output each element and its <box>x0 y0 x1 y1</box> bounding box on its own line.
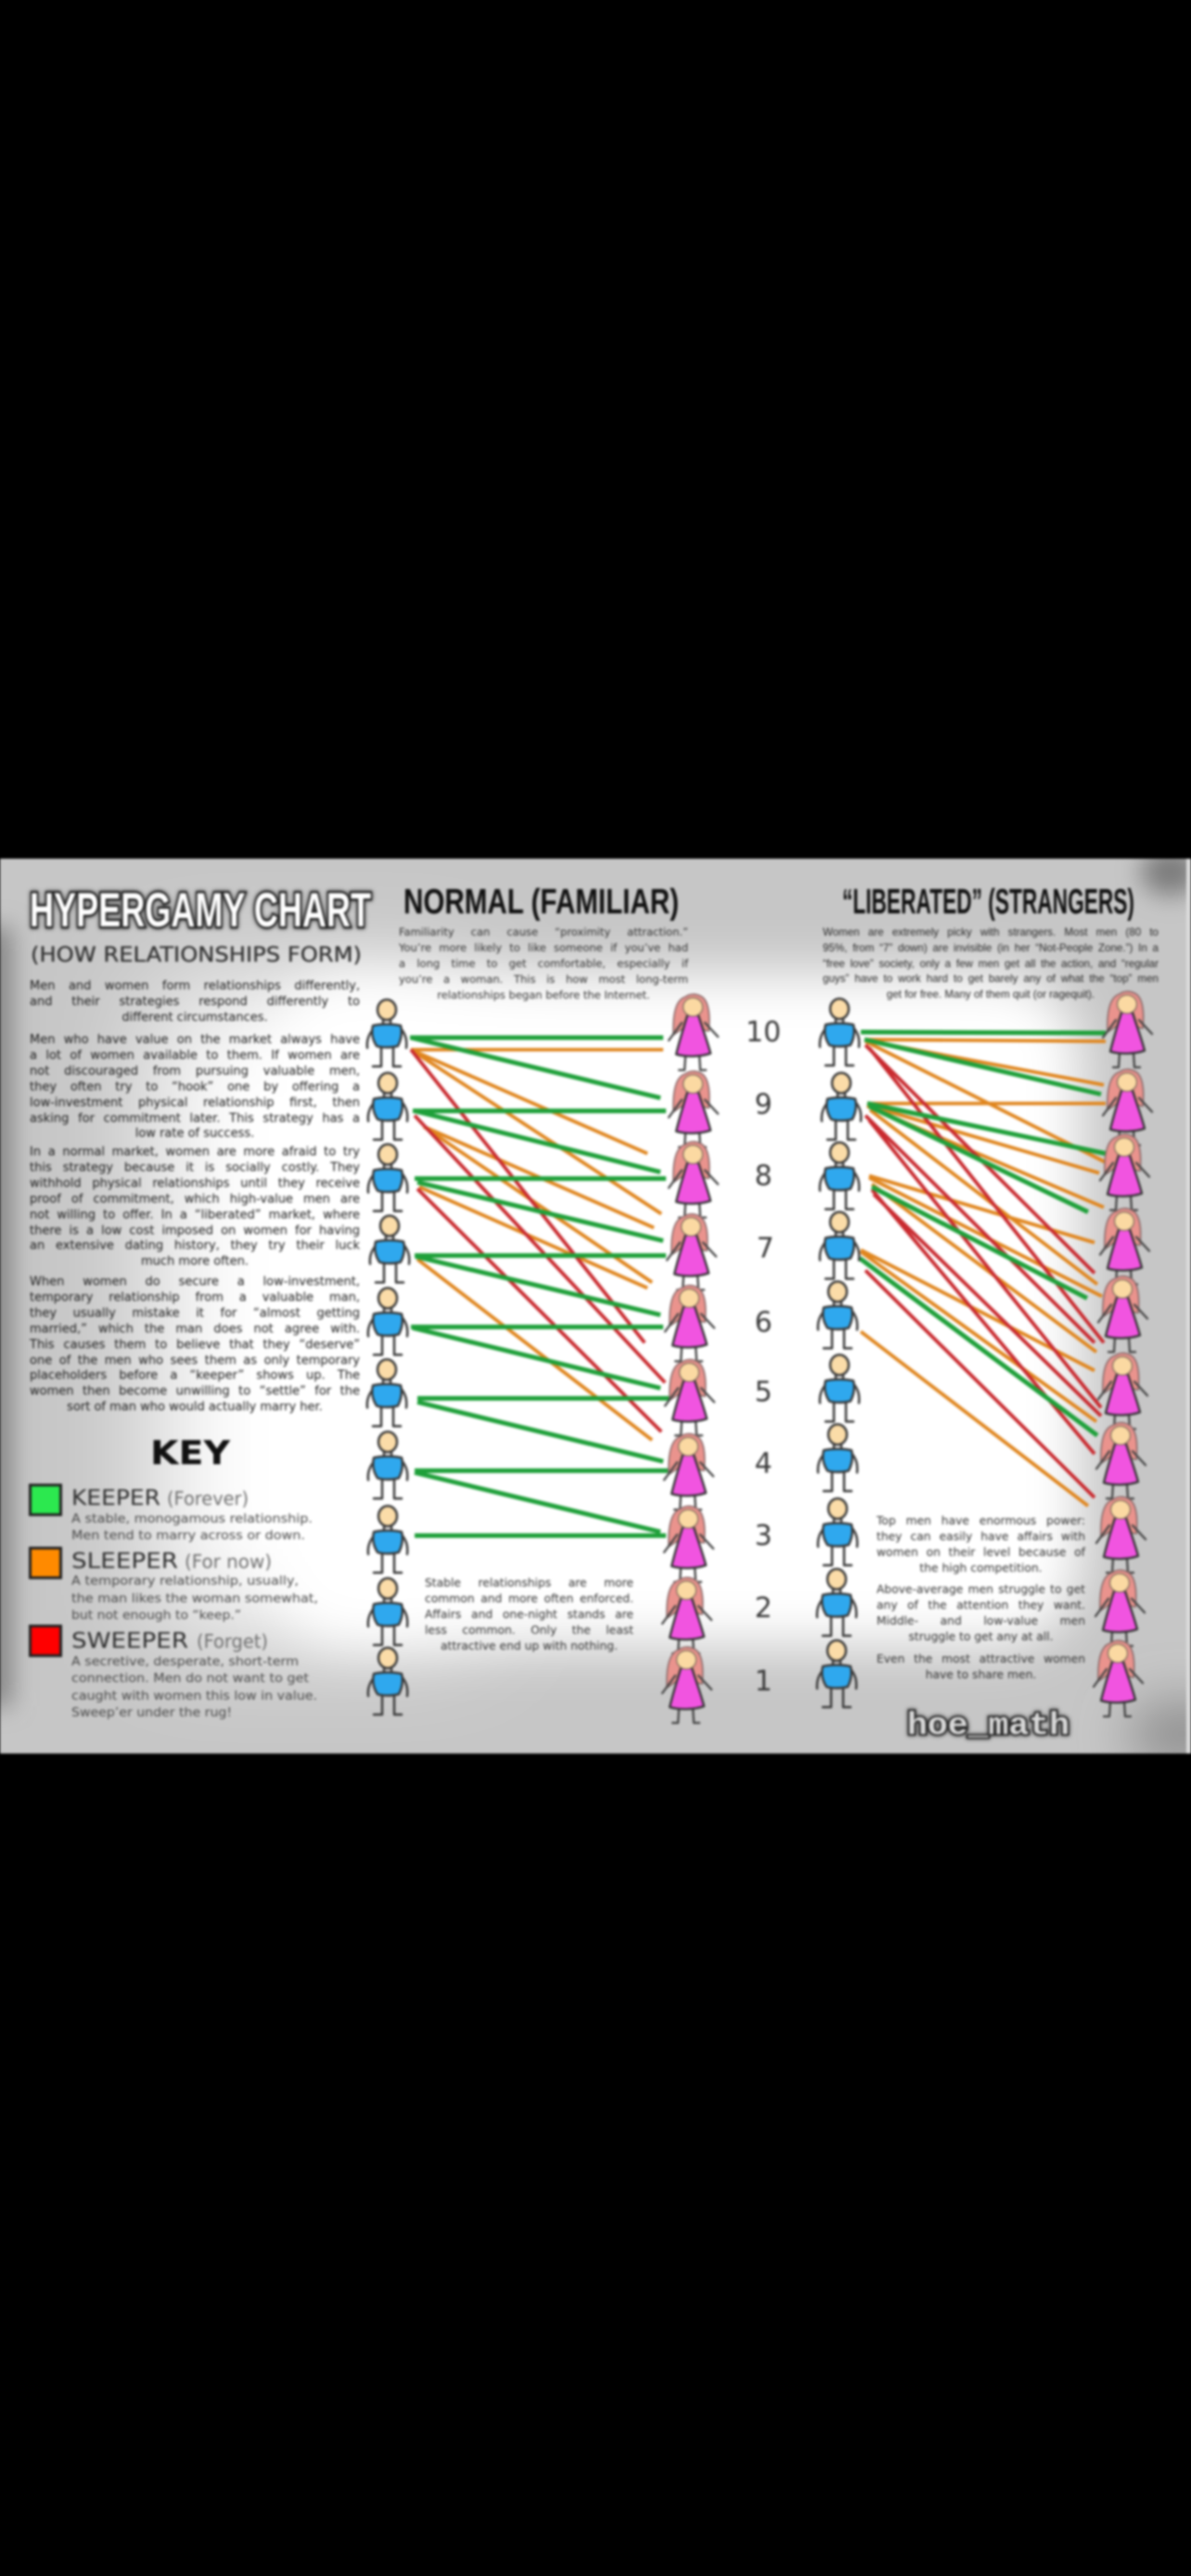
text block: liberated description: Women are extremely picky with strangers. Most men (80 to <box>823 926 1159 938</box>
text block: normal familiar description: Familiarity can cause “proximity attraction.” <box>399 925 688 938</box>
text block: top men: the high competition. <box>919 1562 1043 1575</box>
text block: low-investment relationships: they usually mistake it for “almost getting <box>30 1307 360 1320</box>
rating scale numbers 10 to 1: 3 <box>754 1520 773 1552</box>
text block: above-average men <box>876 1583 1086 1645</box>
text block: low-investment relationships: temporary relationship from a valuable man, <box>30 1291 360 1305</box>
key item: sleeper: SLEEPER <box>71 1549 178 1574</box>
text block: normal familiar description: relationships began before the Internet. <box>437 988 650 1001</box>
text block: intro <box>29 978 362 1025</box>
text block: low-investment relationships <box>28 1274 361 1415</box>
text block: normal market: much more often. <box>141 1255 249 1269</box>
normal chart: column of women <box>662 994 718 1723</box>
text block: low-investment relationships: married,” which the man does not agree with. <box>30 1322 360 1336</box>
rating scale numbers 10 to 1: 9 <box>754 1089 773 1121</box>
background panel with grey vignette <box>0 848 1191 1766</box>
text block: low-investment relationships: This causes them to believe that they “deserve” <box>30 1338 360 1352</box>
text block: men with value: low rate of success. <box>135 1127 254 1141</box>
text block: normal familiar description: you’re a woman. This is how most long-term <box>399 973 688 986</box>
text block: above-average men: Above-average men struggle to get <box>877 1583 1085 1596</box>
liberated chart: column of men <box>817 999 861 1707</box>
text block: above-average men: struggle to get any at all. <box>909 1630 1054 1643</box>
text block: men with value: they often try to “hook” one by offering a <box>30 1080 360 1094</box>
normal chart: sleeper lines (orange) <box>411 1050 663 1440</box>
text block: low-investment relationships: When women do secure a low-investment, <box>30 1275 360 1289</box>
text block: liberated description: get for free. Many of them quit (or ragequit). <box>887 988 1095 1001</box>
text block: attractive women: have to share men. <box>926 1668 1036 1681</box>
text block: normal familiar description: You’re more likely to like someone if you’ve had <box>399 941 688 954</box>
text block: low-investment relationships: placeholders before a “keeper” shows up. The <box>30 1369 360 1383</box>
text block: intro: different circumstances. <box>122 1011 268 1025</box>
text block: low-investment relationships: sort of man who would actually marry her. <box>67 1400 323 1414</box>
text block: normal market: not willing to offer. In a “liberated” market, where <box>30 1208 360 1222</box>
text block: liberated description <box>822 926 1159 1001</box>
rating scale numbers 10 to 1: 5 <box>754 1376 773 1409</box>
text block: top men: Top men have enormous power: <box>877 1514 1085 1527</box>
hoe_math watermark: hoe_math <box>907 1709 1069 1744</box>
text block: stable relationships: Stable relationships are more <box>425 1576 634 1589</box>
key item: keeper: KEEPER <box>71 1486 160 1511</box>
text block: normal familiar description <box>398 925 690 1003</box>
rating scale numbers 10 to 1: 1 <box>754 1665 773 1698</box>
rating scale numbers 10 to 1: 4 <box>754 1447 773 1480</box>
key item: keeper: (Forever) <box>167 1487 249 1510</box>
heading: normal familiar: NORMAL (FAMILIAR) <box>403 883 679 922</box>
text block: above-average men: Middle- and low-value men <box>877 1614 1085 1627</box>
text block: men with value: asking for commitment later. This strategy has a <box>30 1112 360 1126</box>
text block: top men: they can easily have affairs with <box>877 1530 1085 1543</box>
key item: sweeper: SWEEPER <box>71 1629 188 1653</box>
normal chart: keeper lines (green) <box>410 1038 671 1536</box>
text block: normal market: In a normal market, women are more afraid to try <box>30 1145 360 1159</box>
text block: men with value <box>29 1033 361 1141</box>
key item: keeper: A stable, monogamous relationship. <box>71 1512 313 1526</box>
key item: keeper: Men tend to marry across or down. <box>71 1529 305 1543</box>
text block: low-investment relationships: women then become unwilling to “settle” for the <box>30 1384 360 1398</box>
key item: sleeper: the man likes the woman somewhat, <box>71 1592 318 1606</box>
rating scale numbers 10 to 1: 6 <box>754 1307 773 1339</box>
text block: stable relationships <box>423 1576 634 1654</box>
text block: stable relationships: less common. Only the least <box>425 1624 634 1637</box>
key item: sleeper: A temporary relationship, usually, <box>71 1575 299 1588</box>
key item: sleeper: but not enough to “keep.” <box>71 1609 241 1623</box>
text block: stable relationships: attractive end up with nothing. <box>441 1639 618 1652</box>
key item: sweeper: connection. Men do not want to get <box>71 1672 309 1686</box>
normal chart: column of men <box>367 1000 409 1715</box>
rating scale numbers 10 to 1: 7 <box>756 1232 775 1265</box>
rating scale numbers 10 to 1: 8 <box>754 1160 773 1192</box>
text block: intro: Men and women form relationships differently, <box>30 979 360 993</box>
text block: men with value: low-investment physical relationship first, then <box>30 1096 360 1110</box>
text block: normal familiar description: a long time to get comfortable, especially if <box>399 957 688 970</box>
text block: men with value: a lot of women available to them. If women are <box>30 1049 360 1063</box>
text block: stable relationships: common and more often enforced. <box>425 1592 634 1605</box>
key heading: KEY <box>150 1435 231 1473</box>
key item: sweeper: caught with women this low in value. <box>71 1690 317 1703</box>
text block: normal market: withhold physical relationships until they receive <box>30 1177 360 1191</box>
text block: top men: women on their level because of <box>877 1546 1085 1559</box>
text block: normal market: this strategy because it is socially costly. They <box>30 1161 360 1175</box>
key item: sweeper: Sweep’er under the rug! <box>71 1706 232 1720</box>
liberated chart: sleeper lines (orange) <box>861 1039 1107 1506</box>
text block: normal market: proof of commitment, which high-value men are <box>30 1192 360 1206</box>
text block: above-average men: any of the attention they want. <box>877 1599 1085 1612</box>
key item: keeper <box>30 1486 313 1543</box>
title: HYPERGAMY CHART <box>30 884 371 937</box>
key item: sleeper: (For now) <box>185 1550 272 1573</box>
subtitle: (HOW RELATIONSHIPS FORM) <box>31 944 362 967</box>
text block: stable relationships: Affairs and one-night stands are <box>425 1608 634 1621</box>
text block: attractive women: Even the most attractive women <box>877 1652 1085 1665</box>
liberated chart: column of women <box>1094 991 1152 1716</box>
text block: liberated description: guys” have to work hard to get barely any of what the “top” men <box>823 973 1159 985</box>
text block: attractive women <box>876 1652 1086 1681</box>
rating scale numbers 10 to 1: 2 <box>754 1592 773 1625</box>
key item: sweeper <box>30 1626 317 1720</box>
text block: normal market <box>29 1144 361 1269</box>
text block: low-investment relationships: one of the men who sees them as only temporary <box>30 1354 360 1368</box>
text block: normal market: there is a low cost imposed on women for having <box>30 1224 360 1238</box>
normal chart: sweeper lines (red) <box>411 1050 665 1432</box>
key item: sleeper <box>30 1549 318 1623</box>
text block: normal market: an extensive dating history, they try their luck <box>30 1239 360 1253</box>
key item: sweeper: (Forget) <box>197 1630 268 1652</box>
liberated chart: keeper lines (green) <box>860 1032 1106 1435</box>
text block: men with value: Men who have value on the market always have <box>30 1033 360 1047</box>
rating scale numbers 10 to 1: 10 <box>746 1016 781 1049</box>
liberated chart: sweeper lines (red) <box>865 1045 1104 1498</box>
text block: men with value: not discouraged from pursuing valuable men, <box>30 1065 360 1078</box>
rating scale numbers 10 to 1 <box>746 1016 781 1698</box>
key item: sweeper: A secretive, desperate, short-term <box>71 1655 299 1669</box>
text block: liberated description: “free love” society, only a few men get all the action, and “regular <box>823 958 1159 970</box>
text block: liberated description: 95%, from “7” down) are invisible (in her “Not-People Zone.”) In a <box>823 942 1159 954</box>
text block: top men <box>876 1514 1087 1576</box>
text block: intro: and their strategies respond differently to <box>30 995 360 1009</box>
